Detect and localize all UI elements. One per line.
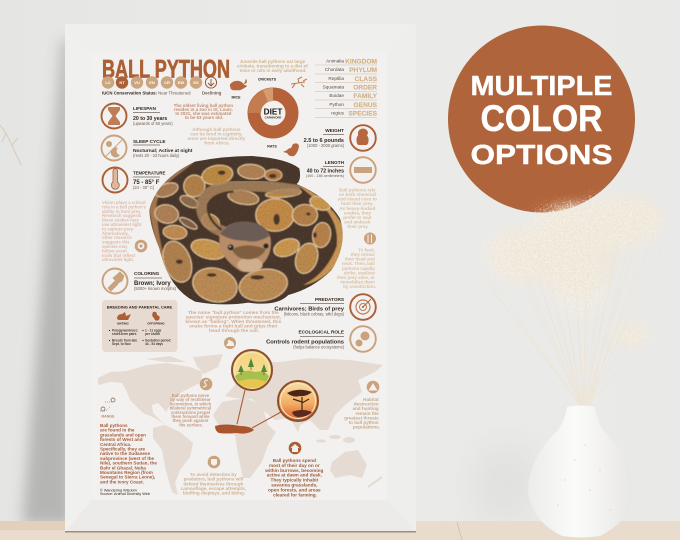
diet donut chart: DIET: [264, 108, 282, 116]
text: locomotion: they push against: [173, 418, 209, 423]
text: chemical and visual cues: and ambush: [344, 220, 371, 225]
text: defence: predators, ball pythons will: [184, 477, 243, 482]
text: defence: bluffing displays, and biting.: [183, 491, 245, 496]
text: burrows: open forests, and areas: [268, 487, 321, 492]
taxonomy ladder: KINGDOM: [345, 58, 378, 65]
vase shadow on wall: [473, 445, 537, 525]
IUCN status badges: EN: [149, 80, 155, 85]
text: threats: remain the: [355, 411, 379, 416]
range marker: [100, 398, 115, 418]
text: range description: Nile), southern Sudan, the: [100, 461, 157, 466]
text: burrows: within burrows, becoming: [264, 468, 324, 473]
fact: lifespan: [102, 104, 173, 128]
text: feeding: by constriction.: [343, 284, 376, 289]
text: balling defence: The name "ball python" comes from the: [188, 310, 279, 316]
taxonomy ladder: Squamata: [323, 84, 344, 90]
wooden shelf: [0, 521, 680, 540]
text: balling defence: known as "balling". When threatened, this: [185, 319, 282, 325]
text: vision: ultraviolet light.: [102, 257, 134, 262]
fact: temperature: (24 - 30° C): [133, 185, 155, 190]
text: feeding: strike, swallow: [344, 270, 375, 275]
fact: length: LENGTH: [325, 160, 345, 165]
taxonomy ladder: Chordata: [325, 67, 344, 72]
icon: locomotion: [200, 378, 212, 390]
taxonomy ladder: Animalia: [326, 58, 344, 63]
text: locomotion: by way of rectilinear: [170, 397, 211, 402]
text: threats: populations.: [353, 425, 380, 430]
text: balling defence: species' signature protection mechanism,: [186, 314, 282, 320]
text: range description: are found in the: [100, 428, 135, 433]
text: vision: species may: [102, 244, 128, 249]
panel: breeding and parental care: Sept. to Nov.: [112, 342, 131, 346]
title: BALL PYTHON: [102, 56, 230, 84]
text: chemical and visual cues: hunt their prey.: [341, 201, 374, 206]
world map: [98, 354, 383, 495]
fact: lifespan: 20 to 30 years: [133, 116, 167, 122]
fact: temperature: 75 - 85° F: [133, 180, 160, 186]
text: chemical and visual cues: prefer to wait: [343, 215, 372, 220]
text: threats: and hunting: [352, 406, 379, 411]
text: locomotion: contractions propel: [171, 410, 210, 415]
fact: coloring: COLORING: [134, 271, 160, 276]
diet labels and prey icons: RATS: [267, 144, 277, 148]
panel: breeding and parental care: Gestation period:: [145, 338, 171, 342]
taxonomy ladder: PHYLUM: [349, 67, 378, 74]
text: burrows: They typically inhabit: [271, 478, 319, 483]
fact: sleep cycle: (rests 20 - 23 hours daily): [133, 153, 180, 158]
inset: grassland habitat: [232, 350, 272, 390]
scale texture: [150, 164, 342, 302]
conservation status line: Declining: [202, 90, 222, 96]
text: vision: Alternatively,: [102, 231, 129, 236]
text: vision: trails that reflect: [102, 253, 136, 258]
fact: weight: (1000 - 2000 grams): [307, 143, 345, 148]
fact: temperature: TEMPERATURE: [133, 171, 166, 176]
text: juvenile diet: crickets, transitioning to a diet of: [237, 64, 308, 68]
dried flowers: [473, 190, 668, 405]
taxonomy ladder: SPECIES: [348, 110, 378, 117]
taxonomy ladder: CLASS: [355, 76, 378, 83]
poster: [92, 53, 387, 500]
fact: lifespan: (upwards of 50 years): [133, 121, 173, 126]
text: oldest living ball python: resides in a zoo in St. Louis.: [174, 107, 233, 112]
panel: breeding and parental care: MATING: [117, 322, 129, 326]
fact: sleep cycle: [102, 136, 193, 160]
text: range description: and the Ivory Coast.: [100, 479, 144, 484]
text: range description: Specifically, they are: [100, 446, 146, 452]
text: range description: native to the Sudanese: [100, 451, 150, 456]
icon: eye: [135, 240, 147, 252]
text: oldest living ball python: In 2021, she was estimated: [175, 111, 232, 116]
fact: length: [306, 157, 376, 183]
fact: weight: 2.5 to 6 pounds: [304, 138, 344, 144]
text: vision: ability to hunt prey.: [102, 209, 141, 214]
icon: rat: [283, 143, 299, 156]
fact: coloring: [102, 268, 177, 294]
snake neck: [202, 186, 295, 232]
text: captivity note: can be bred in captivity,: [190, 132, 242, 136]
picture frame: [65, 24, 416, 532]
fact: predators: PREDATORS: [315, 297, 344, 302]
text: chemical and visual cues: their prey.: [347, 224, 369, 229]
text: feeding: To feed,: [358, 248, 375, 252]
text: locomotion: Ball pythons move: [172, 393, 210, 398]
text: vision: Vision plays a critical: [102, 200, 146, 205]
text: threats: to ball python: [349, 420, 379, 425]
text: balling defence: head through the coil.: [209, 328, 259, 334]
icon: mating snakes: [117, 312, 131, 320]
badge: multiple color options: COLOR: [480, 98, 602, 139]
panel: breeding and parental care: short-term pairs: [112, 332, 137, 336]
ball python photo: [149, 156, 343, 304]
icon: warning: [367, 381, 379, 393]
fact: temperature: [102, 168, 166, 192]
taxonomy ladder: regius: [331, 110, 345, 115]
fact: coloring: (5000+ known morphs): [134, 286, 177, 291]
vase: [528, 406, 633, 538]
text: defence: To avoid detection by: [190, 472, 237, 477]
taxonomy ladder: ORDER: [353, 84, 377, 92]
text: captivity note: most are imported directly: [188, 136, 246, 141]
text: threats: greatest threats: [344, 415, 379, 420]
text: feeding: they retract: [351, 252, 375, 257]
text: vision: Research suggests: [102, 213, 142, 218]
panel: breeding and parental care: 44 - 54 days: [145, 342, 163, 346]
text: range description: forests of West and: [100, 437, 143, 442]
text: locomotion: bilateral symmetrical: [170, 406, 211, 411]
text: range description: subprovince (west of the: [100, 456, 155, 461]
text: locomotion: them forward while: [171, 414, 210, 419]
taxonomy ladder: [315, 58, 378, 117]
text: burrows: Ball pythons spend: [273, 458, 316, 463]
text: juvenile diet: Juvenile ball pythons eat large: [240, 59, 306, 64]
icon: coiled snake: [224, 337, 236, 349]
IUCN status badges: CR: [164, 80, 170, 85]
text: chemical and visual cues: snakes, they: [344, 210, 371, 215]
fact: coloring: Brown; Ivory: [134, 281, 171, 287]
text: burrows: cleared for farming.: [273, 492, 317, 497]
text: range description: Mountains Region (from: [100, 470, 153, 475]
text: vision: use ultraviolet light: [102, 222, 142, 227]
icon: fork and knife: [364, 232, 376, 244]
text: locomotion: the surface.: [179, 422, 203, 427]
fact: length: (100 - 185 centimeters): [306, 174, 344, 178]
snake head: [219, 222, 271, 272]
text: burrows: active at dawn and dusk.: [267, 473, 322, 478]
panel: breeding and parental care: [102, 300, 178, 352]
text: feeding: their prey alive, or: [337, 275, 375, 280]
fact: ecological role: [266, 326, 376, 352]
IUCN status badges: NT: [119, 80, 125, 85]
taxonomy ladder: FAMILY: [353, 93, 378, 100]
frame shadow on wall: [22, 40, 72, 525]
text: juvenile diet: mice or rats in early adulthood.: [240, 68, 306, 73]
taxonomy ladder: GENUS: [354, 102, 378, 109]
badge: multiple color options: OPTIONS: [470, 139, 612, 170]
badge: multiple color options: MULTIPLE: [470, 70, 612, 101]
text: feeding: pythons rapidly: [342, 266, 375, 271]
fact: predators: (falcons, black cobras, wild dogs): [284, 312, 345, 316]
fact: length: 40 to 72 inches: [307, 168, 344, 174]
source credits: Source: Animal Diversity Web: [100, 492, 150, 496]
text: chemical and visual cues: Ball pythons rely: [339, 188, 376, 192]
text: captivity note: from Africa.: [204, 140, 230, 146]
text: burrows: savanna grasslands,: [271, 482, 317, 488]
text: chemical and visual cues: on both chemical: [339, 192, 376, 197]
inset: savanna habitat: [278, 381, 318, 421]
taxonomy ladder: Python: [329, 102, 344, 107]
panel: breeding and parental care: BREEDING AND PARENTAL CARE: [107, 304, 173, 309]
text: range description: Bahr el Ghazal, Nuba: [100, 465, 146, 470]
taxonomy ladder: Boidae: [329, 93, 344, 98]
text: vision: to capture prey.: [102, 226, 134, 231]
IUCN status badges: [102, 76, 217, 89]
fact: ecological role: Controls rodent populations: [266, 340, 344, 346]
fact: weight: WEIGHT: [325, 128, 344, 133]
text: feeding: immobilize them: [340, 280, 375, 285]
IUCN status badges: EX: [193, 80, 199, 85]
conservation status line: IUCN Conservation Status: Near Threatened: [102, 90, 191, 96]
fact: weight: [304, 125, 376, 151]
dried twig at left: [0, 125, 21, 165]
diet labels and prey icons: MICE: [232, 96, 241, 100]
text: range description: Senegal to Sierra Leone),: [100, 475, 155, 480]
text: defence: defend themselves through: [183, 481, 244, 486]
text: oldest living ball python: The oldest living ball python: [174, 103, 233, 108]
source credits: © Wandering Wisdom: [100, 488, 137, 492]
icon: defence shield: [208, 456, 220, 468]
text: chemical and visual cues: and visual cues to: [338, 197, 377, 202]
panel: breeding and parental care: 1 - 11 eggs: [145, 328, 162, 332]
text: feeding: neck. Then, ball: [342, 261, 375, 266]
fact: lifespan: LIFESPAN: [133, 106, 156, 111]
text: feeding: their head and: [345, 257, 375, 262]
icon: cricket: [291, 77, 307, 88]
icon: eggs: [152, 312, 160, 321]
fact: sleep cycle: Nocturnal; Active at night: [133, 148, 193, 154]
text: locomotion: locomotion, in which: [170, 401, 212, 406]
IUCN status badges: EW: [178, 80, 184, 85]
source credits: [100, 488, 150, 496]
fact: ecological role: (helps balance ecosystems): [293, 344, 345, 350]
text: vision: these snakes may: [102, 218, 139, 223]
text: burrows: most of their day on or: [269, 463, 320, 468]
badge: multiple color options: [448, 26, 635, 212]
text: vision: other research: [102, 235, 132, 240]
native range on map with leader lines: [215, 390, 281, 434]
text: range description: grasslands and open: [100, 432, 146, 437]
panel: breeding and parental care: per clutch: [145, 332, 160, 336]
text: threats: Habitat: [363, 397, 379, 402]
taxonomy ladder: Reptilia: [328, 76, 344, 81]
IUCN status badges: LC: [105, 80, 111, 85]
text: captivity note: Although ball pythons: [192, 127, 241, 132]
text: threats: destruction: [354, 402, 379, 407]
text: range description: Ball pythons: [100, 423, 128, 428]
fact: predators: [274, 294, 376, 320]
text: vision: role in a ball python's: [102, 204, 147, 209]
text: balling defence: snake forms a tight ball and grips their: [189, 324, 278, 330]
panel: breeding and parental care: Breeds from late: [112, 338, 137, 342]
IUCN status badges: VU: [134, 80, 140, 85]
panel: breeding and parental care: Polygynandrous;: [112, 328, 138, 332]
icon: home: [289, 442, 301, 454]
text: chemical and visual cues: As heavy-bodied: [339, 206, 376, 211]
text: vision: follow scent: [102, 248, 127, 253]
text: vision: suggests this: [102, 240, 130, 245]
range marker: RANGE: [102, 414, 115, 418]
text: oldest living ball python: to be 63 years old.: [185, 115, 223, 120]
fact: sleep cycle: SLEEP CYCLE: [133, 139, 165, 144]
diet labels and prey icons: [230, 77, 307, 156]
diet donut chart: [248, 88, 292, 132]
fact: predators: Carnivores; Birds of prey: [274, 306, 345, 312]
text: defence: camouflage, escape attempts,: [181, 486, 246, 491]
diet labels and prey icons: CRICKETS: [258, 78, 277, 82]
icon: mouse: [230, 79, 247, 90]
text: range description: Central Africa.: [100, 442, 131, 447]
fact: ecological role: ECOLOGICAL ROLE: [298, 330, 344, 335]
panel: breeding and parental care: OFFSPRING: [147, 322, 165, 326]
diet donut chart: CARNIVORE: [265, 116, 282, 120]
